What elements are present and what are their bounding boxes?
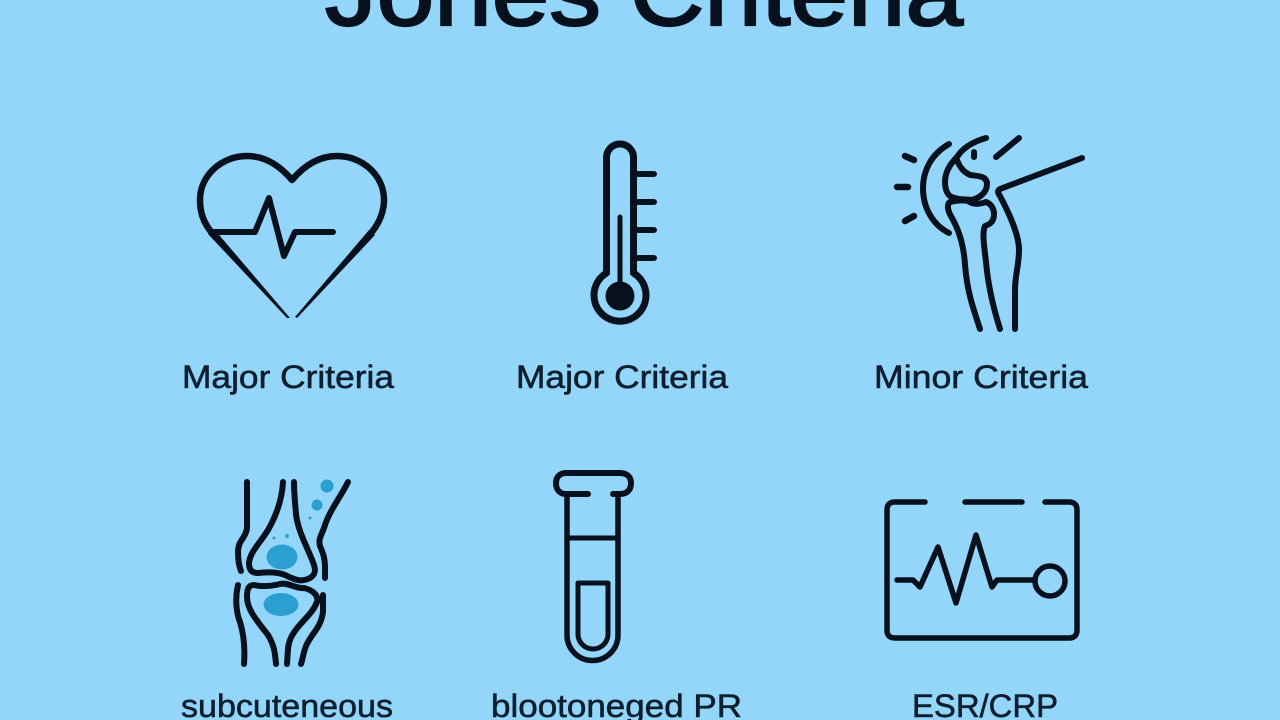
- icon: ECG monitor: [887, 502, 1077, 638]
- icon: thermometer: [594, 144, 654, 321]
- label: major criteria 1: Major Criteria: [182, 359, 394, 395]
- icon: test tube: [556, 473, 631, 661]
- icon: inflamed joint: [897, 138, 1082, 329]
- label: minor criteria: Minor Criteria: [874, 359, 1088, 395]
- label: major criteria 2: Major Criteria: [516, 359, 728, 395]
- icon: heart with pulse: [200, 156, 384, 318]
- icon: knee with subcutaneous nodules: [236, 480, 348, 664]
